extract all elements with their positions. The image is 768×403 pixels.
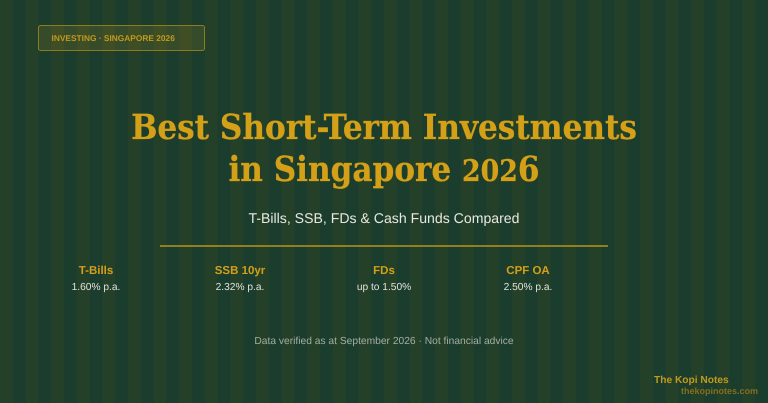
title: Best Short-Term Investments xyxy=(131,108,637,148)
stat: FDs xyxy=(357,265,411,293)
stat: T-Bills: 1.60% p.a. xyxy=(72,282,120,293)
title: in Singapore 2026 xyxy=(228,150,540,190)
title xyxy=(131,108,637,190)
stat: SSB 10yr xyxy=(215,265,266,293)
disclaimer: Data verified as at September 2026 · Not financial advice xyxy=(254,336,514,347)
stat: FDs: FDs xyxy=(373,265,395,277)
stat: T-Bills: T-Bills xyxy=(79,265,113,277)
brand: The Kopi Notes: thekopinotes.com xyxy=(681,386,758,396)
stat: SSB 10yr: 2.32% p.a. xyxy=(216,282,264,293)
stat: T-Bills xyxy=(72,265,120,293)
divider xyxy=(160,245,608,247)
stat: SSB 10yr: SSB 10yr xyxy=(215,265,265,277)
brand: The Kopi Notes: The Kopi Notes xyxy=(654,375,729,386)
stat: CPF OA: CPF OA xyxy=(506,265,550,277)
badge xyxy=(38,25,205,51)
badge: INVESTING · SINGAPORE 2026 xyxy=(52,33,175,43)
brand: The Kopi Notes xyxy=(654,375,758,396)
stat: FDs: up to 1.50% xyxy=(357,282,411,293)
subtitle: T-Bills, SSB, FDs & Cash Funds Compared xyxy=(248,210,520,226)
stat: CPF OA: 2.50% p.a. xyxy=(504,282,552,293)
stat: CPF OA xyxy=(504,265,552,293)
